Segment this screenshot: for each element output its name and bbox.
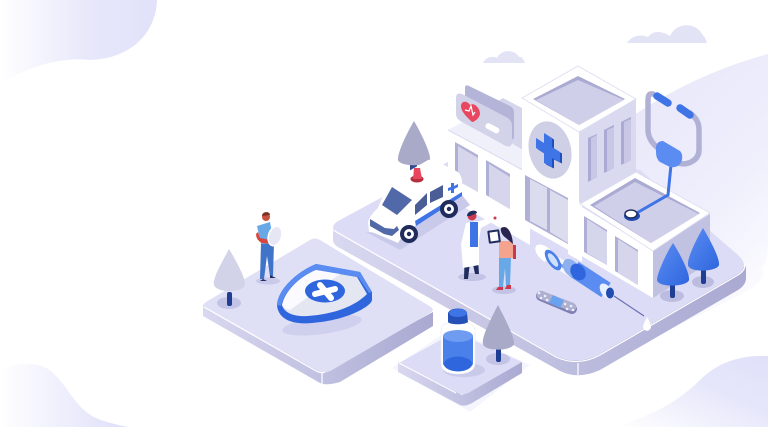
cross	[448, 183, 458, 193]
windshield	[382, 187, 412, 215]
siren	[410, 176, 424, 182]
stripe	[415, 192, 462, 226]
tree: small platform gray	[483, 305, 514, 365]
right wing right face	[653, 214, 710, 298]
cloud: right	[627, 25, 707, 43]
wheels	[400, 225, 418, 243]
cloud: left	[483, 51, 525, 63]
left platform	[203, 238, 433, 384]
background blob: bottom right	[616, 356, 768, 427]
tower left face	[522, 98, 579, 256]
bottle cap	[448, 308, 468, 324]
left wing back wall	[470, 98, 522, 168]
water drop	[643, 317, 651, 331]
ambulance	[366, 160, 470, 250]
background blob: top left	[0, 0, 157, 84]
right wing windows	[584, 216, 607, 265]
bandage	[539, 293, 573, 310]
right wing left face	[580, 206, 653, 298]
trees: blue	[657, 228, 719, 302]
ear tips	[657, 96, 668, 103]
bottle	[441, 308, 485, 377]
circle emblem	[523, 117, 577, 183]
person: doctor	[458, 211, 496, 281]
window: left 1	[455, 142, 478, 192]
lower connecting front	[568, 196, 582, 262]
main platform	[333, 150, 746, 375]
left wing roof ledge	[448, 118, 523, 172]
chest piece	[624, 211, 640, 221]
background blob: bottom left	[0, 364, 128, 427]
tower right face	[579, 98, 636, 205]
person: woman with tablet	[487, 227, 516, 294]
right wing roof	[580, 172, 710, 251]
hospital building	[448, 66, 710, 298]
tower roof	[522, 66, 636, 132]
tube	[635, 165, 671, 214]
shield	[277, 264, 372, 339]
bumper	[370, 219, 399, 236]
small platform	[392, 328, 530, 412]
tree: back gray	[398, 121, 430, 174]
tree: left gray	[214, 249, 245, 309]
side windows	[415, 193, 427, 215]
background blob: right	[560, 54, 768, 340]
window: left 2	[486, 160, 510, 209]
sign: heart panel	[456, 85, 514, 146]
medical cross	[536, 133, 562, 168]
syringe	[535, 245, 644, 316]
heart icon	[461, 102, 480, 122]
tower windows	[588, 134, 597, 182]
pill dash	[484, 122, 500, 134]
shield cross badge	[305, 280, 345, 302]
person: man with disc	[256, 212, 284, 284]
entrance door	[525, 175, 568, 244]
stethoscope	[624, 94, 699, 221]
left wing front	[448, 130, 530, 245]
